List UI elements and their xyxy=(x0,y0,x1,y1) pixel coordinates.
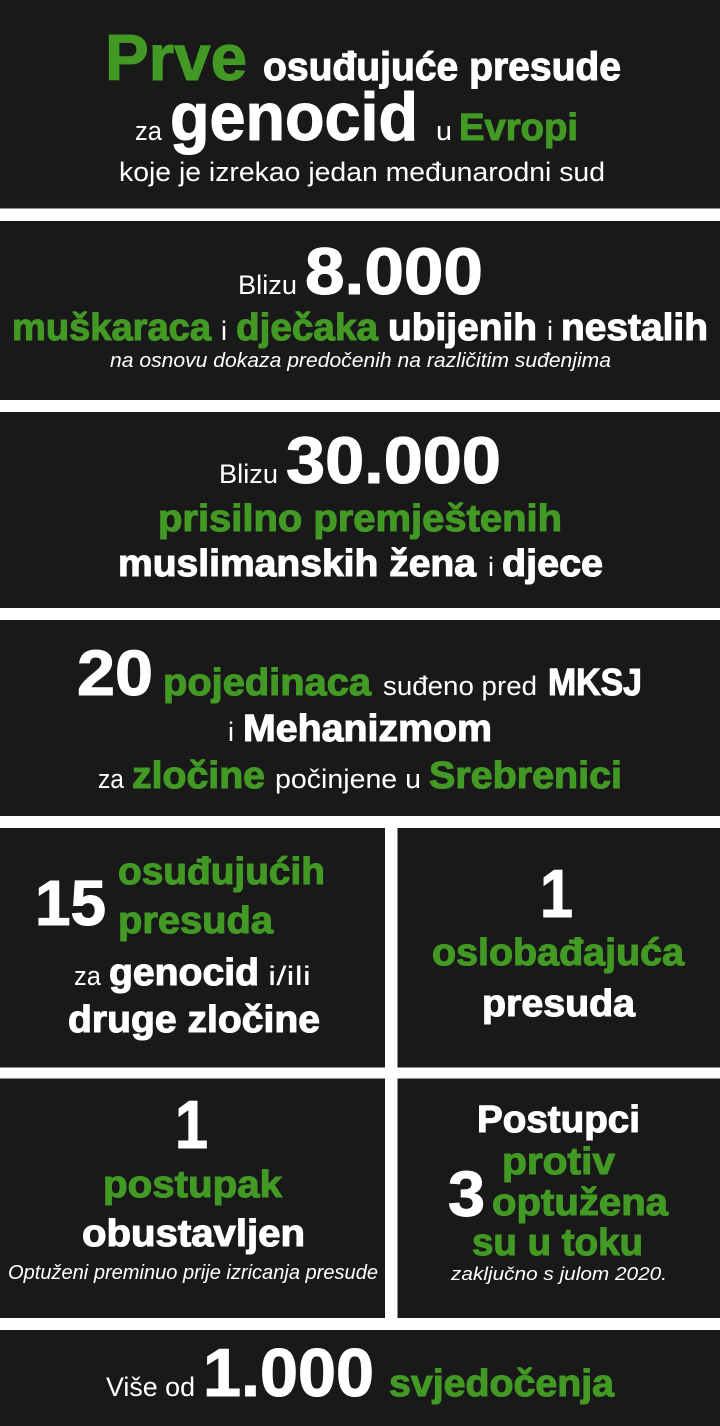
line: crimes in Srebrenica: za xyxy=(98,764,125,794)
note: as of July 2020: zaključno s julom 2020. xyxy=(450,1264,667,1284)
note: evidence: na osnovu dokaza predočenih na različitim suđenjima xyxy=(110,350,611,372)
panel: 30.000 women and children xyxy=(0,412,720,608)
panel: 1 acquittal xyxy=(398,828,720,1068)
text: killed and missing: muškaraca xyxy=(12,307,212,349)
text: Muslim women and children: muslimanskih žena xyxy=(118,543,477,585)
figure: 8.000: Blizu xyxy=(238,270,297,300)
text: forcibly transferred: prisilno premještenih xyxy=(158,498,562,540)
subtitle: koje je izrekao jedan međunarodni sud xyxy=(119,157,605,187)
figure: 1: 1 xyxy=(175,1087,208,1163)
panel: 15 convictions xyxy=(0,828,385,1068)
panel: 1 proceeding terminated xyxy=(0,1078,385,1318)
figure: 1.000: 1.000 xyxy=(203,1335,374,1411)
line: crimes in Srebrenica: Srebrenici xyxy=(429,755,622,797)
text: testimonies: svjedočenja xyxy=(389,1363,615,1405)
line: crimes in Srebrenica xyxy=(98,755,622,797)
heading line 2: za xyxy=(135,116,163,146)
heading line 2: u xyxy=(436,116,452,146)
heading line 1 xyxy=(105,21,621,94)
line: 20 individuals tried xyxy=(77,637,642,709)
text: killed and missing: i xyxy=(547,316,553,346)
line: 20 individuals tried: MKSJ xyxy=(548,662,642,704)
text: genocide and other crimes: druge zločine xyxy=(68,999,320,1041)
text: genocide and other crimes: i/ili xyxy=(268,961,311,991)
line: crimes in Srebrenica: počinjene u xyxy=(275,764,421,794)
text: genocide and other crimes: za xyxy=(74,961,102,991)
text: proceeding: postupak xyxy=(103,1164,283,1206)
text: accused: optužena xyxy=(492,1182,669,1224)
text: terminated: obustavljen xyxy=(82,1213,305,1255)
note: accused died: Optuženi preminuo prije izricanja presude xyxy=(8,1262,378,1284)
line: 20 individuals tried: pojedinaca xyxy=(163,662,372,704)
panel: 8.000 men and boys xyxy=(0,221,720,400)
text: Muslim women and children: i xyxy=(488,552,494,582)
text: convictions xyxy=(118,851,325,942)
panel: testimonies xyxy=(0,1330,720,1426)
panel: 20 individuals xyxy=(0,620,720,816)
text: convictions: osuđujućih xyxy=(118,851,325,893)
line: 20 individuals tried: suđeno pred xyxy=(383,671,537,701)
figure: 30.000: Blizu xyxy=(219,459,278,489)
figure: 30.000: 30.000 xyxy=(286,423,501,497)
text: convictions: presuda xyxy=(118,900,274,942)
figure: 8.000 xyxy=(238,234,483,308)
text: killed and missing: dječaka xyxy=(236,307,379,349)
panel: title xyxy=(0,0,720,208)
text: genocide and other crimes xyxy=(68,952,320,1041)
text: against: protiv xyxy=(502,1141,615,1183)
text: Muslim women and children: djece xyxy=(502,543,603,585)
text: killed and missing: ubijenih xyxy=(388,307,537,349)
heading line 2 xyxy=(135,79,578,155)
heading line 2: genocid xyxy=(170,79,418,155)
text: acquittal: oslobađajuća xyxy=(432,932,685,974)
text: killed and missing: nestalih xyxy=(561,307,708,349)
heading line 1: osuđujuće presude xyxy=(263,45,621,89)
figure: 8.000: 8.000 xyxy=(305,234,483,308)
text: proceedings: Postupci xyxy=(477,1099,640,1141)
text: more than: Više od xyxy=(106,1372,195,1402)
figure: 3: 3 xyxy=(448,1158,485,1230)
figure: 15: 15 xyxy=(35,867,106,939)
heading line 1: Prve xyxy=(105,21,247,94)
line: crimes in Srebrenica: zločine xyxy=(132,755,265,797)
text: killed and missing: i xyxy=(221,316,227,346)
text: judgement: presuda xyxy=(482,983,636,1025)
panel: proceedings against 3 accused xyxy=(398,1078,720,1318)
line: Mechanism: Mehanizmom xyxy=(243,708,492,750)
figure: 1: 1 xyxy=(540,856,573,932)
line: 20 individuals tried: 20 xyxy=(77,637,153,709)
text: ongoing: su u toku xyxy=(472,1222,643,1264)
heading line 2: Evropi xyxy=(459,107,578,149)
text: genocide and other crimes: genocid xyxy=(109,952,259,994)
line: Mechanism: i xyxy=(228,717,234,747)
text: killed and missing xyxy=(12,307,708,349)
